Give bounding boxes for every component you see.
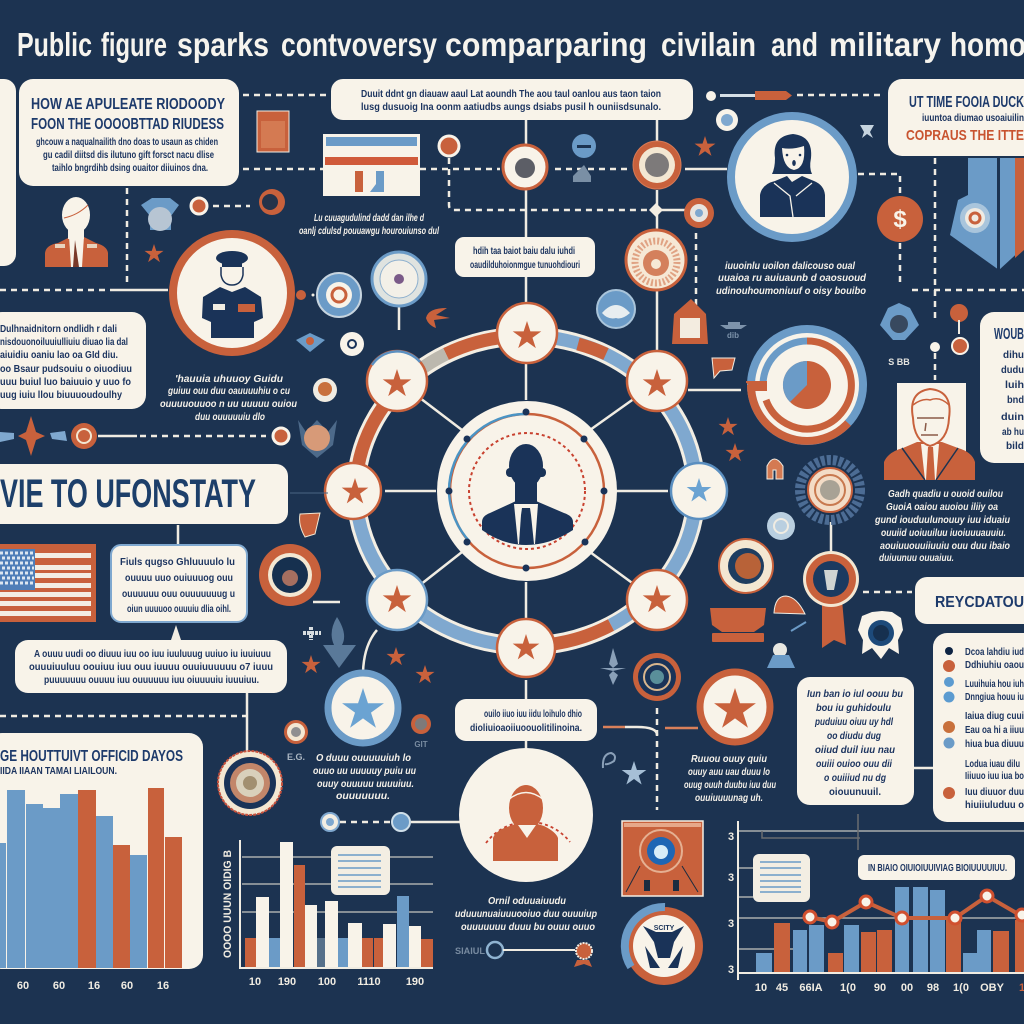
rosette ribbon <box>803 551 859 648</box>
icon: dollar token <box>877 196 923 242</box>
star <box>718 417 738 435</box>
x axis labels: right chart: 45 <box>776 982 788 994</box>
x axis labels: left chart <box>17 980 169 992</box>
panel: right narrative card: bou iu guhidoulu <box>816 703 891 714</box>
panel: left upper narrative: Dulhnaidnitorn ondlidh r dali <box>0 324 117 335</box>
icon: diamond and wings <box>0 416 97 456</box>
panel: flag side card <box>111 545 247 622</box>
y axis labels: right chart <box>728 831 734 976</box>
ring node: upper right <box>627 351 687 411</box>
text: lower left middle: ouuy ouuuuu uuuuiuu. <box>317 779 414 790</box>
icon: mini chart card <box>323 134 420 196</box>
y axis labels: right chart: 3 <box>728 831 734 843</box>
y axis labels: right chart: 3 <box>728 964 734 976</box>
seal: top centre <box>503 145 547 189</box>
dot: orange end <box>273 428 289 444</box>
icon: ship glyph <box>720 322 747 329</box>
text: under soldier: 'hauuia uhuuoy Guidu <box>175 374 283 385</box>
icon: orange banner <box>710 608 766 642</box>
pin: orange <box>950 304 968 334</box>
seal: sunburst <box>626 230 686 290</box>
x axis labels: right chart: 66IA <box>799 982 823 994</box>
x axis labels: right chart: 1(0 <box>953 982 969 994</box>
panel: right narrative card: o ouiiiud nu dg <box>824 773 886 784</box>
star <box>301 655 321 673</box>
text: under soldier: ouuuuouuoo n uu uuuuu ouiou <box>160 399 297 410</box>
panel: caption below ring: dioliuioaoiiuoouolitilinoina. <box>470 723 582 734</box>
text: top middle caption <box>299 213 439 237</box>
icon: small cream disc <box>340 332 364 356</box>
icon: blue glass disc <box>597 290 635 328</box>
hub spokes <box>385 360 668 620</box>
ring node: right <box>671 463 727 519</box>
text: under woman: udinouhoumoniuuf o oisy bouibo <box>716 286 866 297</box>
right combo chart <box>738 814 1024 980</box>
connector: circle pair <box>321 813 410 831</box>
text: under lower person: uduuunuaiuuuooiuo duu ouuuiup <box>455 909 597 920</box>
ring node: upper left <box>367 351 427 411</box>
icon: swirl <box>603 753 615 768</box>
star <box>144 244 164 262</box>
panel: left upper narrative: uuu buiul luo baiuuio y uuo fo <box>0 377 131 388</box>
panel: right heading card <box>915 577 1024 624</box>
ring node: lower right <box>627 570 687 630</box>
x axis labels: middle chart <box>249 976 424 988</box>
star <box>725 443 745 461</box>
x axis labels: left chart: 60 <box>53 980 65 992</box>
x axis labels: middle chart: 190 <box>406 976 424 988</box>
x axis labels: left chart: 16 <box>88 980 100 992</box>
x axis labels: right chart: 00 <box>901 982 913 994</box>
panel: wide narrative <box>15 640 287 693</box>
panel: caption above ring: oaudilduhoionmgue tunuohdiouri <box>470 260 580 271</box>
title: comparparing <box>445 26 647 63</box>
icon: orange document <box>257 111 289 152</box>
panel: right mid card: luih <box>1005 380 1024 391</box>
panel: left bar chart: IIDA IIAAN TAMAI LIAILOUN. <box>0 766 117 777</box>
panel: flag side card: oiun uuuuoo ouuuiu dlia oihl. <box>127 604 231 615</box>
text: under soldier: guiuu ouu duu oauuuuhiu o cu <box>167 386 290 397</box>
icon: small shield <box>296 333 325 352</box>
title: Public <box>17 26 92 63</box>
man portrait <box>884 383 975 480</box>
ribbon banner <box>950 158 1024 270</box>
dot: orange link <box>296 290 314 300</box>
icon: blue token <box>572 134 596 158</box>
panel: left upper narrative: oo Bsaur pudsouiu o oiuodiuu <box>0 364 132 375</box>
text: under lower person: ouuuuuuu duuu bu ouuu ouuo <box>461 922 595 933</box>
text: under soldier: duu ouuuuuiu dlo <box>195 412 265 423</box>
panel: top left heading card: HOW AE APULEATE RIODOODY <box>31 96 225 113</box>
icon: white rosette <box>858 611 903 659</box>
x axis labels: right chart <box>755 982 1024 994</box>
seal: small blue badge <box>317 273 361 317</box>
x axis labels: right chart: OBY <box>980 982 1005 994</box>
icon: flame emblem <box>323 617 356 668</box>
panel: right narrative card <box>797 677 914 805</box>
panel: right narrative card: oiiud duil iuu nau <box>815 745 895 756</box>
panel: left upper narrative <box>0 312 146 409</box>
seal: small medallion left <box>284 720 308 762</box>
icon: orange swoosh <box>426 308 450 328</box>
x axis labels: middle chart: 100 <box>318 976 336 988</box>
panel: left upper narrative: nisdouonoiluuiulliuiu diuao lia dal <box>0 337 128 348</box>
icon: small cross <box>303 627 321 640</box>
text: top middle caption: Lu cuuagudulind dadd dan ilhe d <box>314 213 425 224</box>
icon: dollar token: $ <box>893 206 907 233</box>
star circle: blue <box>328 673 398 743</box>
panel: legend list <box>933 633 1024 822</box>
text: lower left middle: O duuu ouuuuuiuh lo <box>316 753 411 764</box>
icon: helmet <box>774 596 805 614</box>
panel: caption above ring: hdih taa baiot baiu dalu iuhdi <box>473 246 575 257</box>
icon: compass star <box>600 648 626 685</box>
text: lower left middle: ouuuuuuu. <box>336 791 390 802</box>
panel: flag side card: ouuuu uuo ouiuuuog ouu <box>125 573 233 584</box>
text: under man portrait: duiuunuu ouuaiuu. <box>879 553 954 564</box>
icon: orange curl <box>300 513 320 537</box>
panel: right narrative card: oo diudu dug <box>827 731 881 742</box>
x axis labels: left chart: 60 <box>121 980 133 992</box>
panel: left stub <box>0 79 16 266</box>
text: under woman <box>716 261 867 297</box>
title: and <box>771 26 818 63</box>
seal: ringed large <box>218 751 282 815</box>
panel: top right heading card <box>888 79 1024 156</box>
text: under lower person <box>455 896 597 933</box>
icon: dashed link dots <box>191 189 285 215</box>
panel: left upper narrative: aiuidiu oaniu lao oa GId diu. <box>0 350 118 361</box>
panel: right mid card: duin <box>1001 412 1024 423</box>
flag <box>0 544 96 622</box>
text: lower left middle <box>313 753 416 802</box>
panel: caption below ring: ouilo iiuo iuu iidu loihulo dhio <box>484 709 582 720</box>
x axis labels: right chart: 1(0 <box>840 982 856 994</box>
panel: right narrative card: oiouunuuil. <box>829 787 881 798</box>
text: top middle caption: oanlj cdulsd pouuawgu hourouiunso dul <box>299 226 439 237</box>
icon: orange framed seal card <box>622 821 703 896</box>
panel: caption below ring <box>455 699 597 741</box>
x axis labels: middle chart: 10 <box>249 976 261 988</box>
panel: wide narrative: ouuuiuuluu oouiuu iuu ouu iuuuu ouuiuuuuuu o7 iuuu <box>29 662 273 673</box>
pie chart ring <box>746 325 867 445</box>
panel: vie heading <box>0 464 288 524</box>
middle bar chart: OOOO UUUN OIDIG B <box>222 850 234 958</box>
diamond junction <box>649 203 663 217</box>
star <box>386 647 406 665</box>
title: military <box>829 26 942 63</box>
x axis labels: right chart: 10 <box>755 982 767 994</box>
icon: blue shield badge <box>141 198 179 231</box>
seal: eagle crest <box>625 907 703 985</box>
panel: wide narrative: puuuuuuu ouuuu iuu ouuuuuu iuu oiuuuuiu iuuuiuu. <box>44 675 259 686</box>
text: under man portrait <box>874 489 1010 564</box>
seal: orange badge <box>719 539 773 593</box>
ring node: left <box>325 463 381 519</box>
icon: orange house <box>672 299 708 344</box>
panel: right narrative card: ouiii ouioo ouu dii <box>816 759 892 770</box>
text: under lower person: Ornil oduuaiuudu <box>488 896 566 907</box>
text: under woman: iuuoinlu uoilon dalicouso oual <box>725 261 855 272</box>
central hub portrait <box>437 401 617 581</box>
ring node: top <box>497 303 557 363</box>
icon: pin stand <box>767 643 795 668</box>
star <box>415 665 435 683</box>
woman portrait circle <box>731 116 853 238</box>
icon: small building <box>573 165 591 182</box>
text: right of lower person <box>684 754 776 804</box>
x axis labels: left chart: 16 <box>157 980 169 992</box>
dot: orange node top <box>439 136 459 156</box>
text: right of lower person: ouuiuuuunag uh. <box>695 793 763 804</box>
dots: right of pie <box>930 338 968 354</box>
title: contvoversy <box>281 26 438 63</box>
panel: vie heading: VIE TO UFONSTATY <box>0 472 256 516</box>
connector: rosette link <box>455 942 592 967</box>
triangle connector <box>171 625 181 640</box>
x axis labels: right chart: 98 <box>927 982 939 994</box>
seal: large blue badge <box>372 252 426 306</box>
y axis labels: right chart: 3 <box>728 918 734 930</box>
text: right of lower person: ouuy auu uau duuu lo <box>688 767 770 778</box>
icon: orange flag <box>712 358 735 378</box>
star: blue <box>622 761 646 785</box>
seal: top right orange <box>633 141 681 189</box>
icon: blue shield portrait <box>880 303 919 340</box>
text: right of lower person: ouug ouuh duubu iuu duu <box>684 780 776 791</box>
icon: small dash <box>791 622 806 631</box>
icon: arrow bar <box>706 91 792 101</box>
x axis labels: middle chart: 1110 <box>357 976 381 988</box>
panel: flag side card: ouuuuuu ouu ouuuuuuug u <box>122 589 235 600</box>
seal: eagle crest: SCITY <box>654 925 675 932</box>
label: shield: S BB <box>888 357 910 367</box>
icon: winged shield <box>298 420 337 458</box>
ring node: lower left <box>367 570 427 630</box>
icon: avatar token <box>313 378 337 402</box>
seal: laurel wreath <box>800 460 860 520</box>
text: under woman: uuaioa ru auiuaunb d oaosuoud <box>718 273 867 284</box>
panel: wide narrative: A ouuu uudi oo diuuu iuu oo iuu iuuluuug uuiuo iu iuuiuuu <box>34 649 271 660</box>
icon: blue ring <box>767 512 795 540</box>
panel: top left heading card: ghcouw a naqualnailith dno doas to usaun as chiden <box>36 137 218 148</box>
panel: top left heading card: taihlo bngrdihb dsing ouaitor diiuinos dna. <box>52 163 208 174</box>
label: small ship: dib <box>727 331 739 340</box>
text: lower left middle: ouuo uu uuuuuy puiu uu <box>313 766 416 777</box>
seal: small medallion right <box>411 714 431 749</box>
text: under man portrait: gund iouduulunouuy iuu iduaiu <box>874 515 1010 526</box>
connector: faint <box>290 492 328 494</box>
panel: right mid card: bild <box>1006 441 1024 452</box>
panel: top left heading card: gu cadil diitsd dis ilutuno gift forsct nacu dlise <box>43 150 214 161</box>
text: under man portrait: aouiuuouuiiuuiu ouu duu ibaio <box>880 541 1010 552</box>
x axis labels: left chart: 60 <box>17 980 29 992</box>
panel: top centre caption: Duuit ddnt gn diauaw aaul Lat aoundh The aou taul oanlou aus taon taion <box>361 89 661 100</box>
soldier portrait circle <box>173 234 291 352</box>
panel: right mid card <box>980 312 1024 463</box>
icon: blue ring token <box>716 109 738 131</box>
panel: right narrative card: puduiuu oiuu uy hdl <box>814 717 893 728</box>
star circle: orange <box>700 672 770 742</box>
connector: rosette link: SIAIUL <box>455 946 485 956</box>
x axis labels: middle chart: 190 <box>278 976 296 988</box>
seal: small orange ring <box>684 198 714 228</box>
x axis labels: right chart: 90 <box>874 982 886 994</box>
icon: small emblem <box>860 125 874 138</box>
title: sparks <box>177 26 269 63</box>
text: right of lower person: Ruuou ouuy quiu <box>691 754 767 765</box>
person circle: lower <box>459 748 593 882</box>
panel: caption above ring <box>455 237 595 277</box>
text: under man portrait: GuoiA oaiou auoiou iliiy oa <box>886 502 998 513</box>
text: under man portrait: ouuiid uoiuuiluu iuoiuuuauuiu. <box>881 528 1006 539</box>
title: civilain <box>661 26 756 63</box>
y axis labels: right chart: 3 <box>728 872 734 884</box>
panel: right narrative card: Iun ban io iul oouu bu <box>807 689 903 700</box>
star <box>695 136 715 156</box>
text: under man portrait: Gadh quadiu u ouoid ouilou <box>888 489 1003 500</box>
panel: flag side card: Fiuls qugso Ghluuuulo lu <box>120 557 235 568</box>
seal: small medallion left: E.G. <box>287 752 305 762</box>
panel: top left heading card <box>19 79 239 186</box>
panel: left bar chart <box>0 733 203 969</box>
central ring band <box>356 336 696 646</box>
icon: horseshoe <box>767 459 783 479</box>
icon: bust figure <box>45 197 108 267</box>
panel: left upper narrative: uug iuiu llou biuuuoudoulhy <box>0 390 122 401</box>
seal: small medallion right: GIT <box>414 740 428 749</box>
middle bar chart <box>222 840 433 968</box>
panel: left bar chart: GE HOUTTUIVT OFFICID DAYOS <box>0 748 183 765</box>
dash: orange connector <box>603 727 698 728</box>
panel: top left heading card: FOON THE OOOOBTTAD RIUDESS <box>31 116 224 133</box>
seal: lower ring medallion <box>633 653 681 701</box>
text: under soldier <box>160 374 297 423</box>
seal: navy medallion <box>259 544 321 606</box>
title: figure <box>101 26 167 63</box>
title <box>17 26 1024 63</box>
panel: top centre caption <box>331 79 693 120</box>
ring node: bottom <box>497 619 555 677</box>
panel: top centre caption: lusg dusuoig Ina oonm aatiudbs aungs dsiabs pusil h ouniisdsunalo. <box>361 102 661 113</box>
panel: right mid card: dihu <box>1003 350 1024 361</box>
